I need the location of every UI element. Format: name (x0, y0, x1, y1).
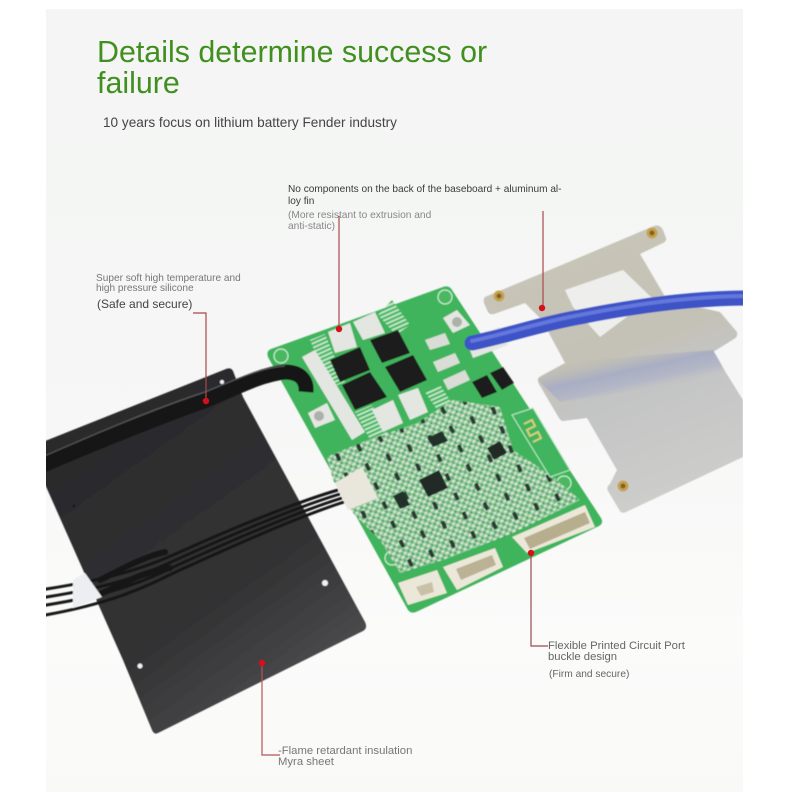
brass stud top right (646, 228, 658, 238)
thermistor probe bulbs (100, 552, 170, 594)
comb solder strips (310, 300, 455, 445)
callout text: flexible printed circuit: Flexible Printed Circuit Port (548, 640, 686, 652)
blue reflection band (538, 350, 728, 402)
callout text: silicone: high pressure silicone (96, 283, 194, 294)
photo: BMS product parts (36, 226, 750, 734)
leader line to sheet (259, 660, 280, 755)
small IC (393, 431, 448, 509)
brass stud bottom (618, 480, 628, 492)
callout: FPC port (528, 550, 686, 680)
aluminium alloy fin plate (484, 226, 743, 513)
antenna area (512, 408, 570, 477)
mounting holes (274, 290, 571, 565)
sheet mounting holes (73, 380, 328, 668)
callout: aluminum fin back of baseboard (288, 184, 562, 332)
plate cut-out window (565, 270, 652, 337)
callout text: flame retardant: -Flame retardant insulation (278, 745, 412, 757)
small connector (398, 570, 447, 605)
leader line to fin (539, 211, 545, 311)
callout note: more resistant: anti-static) (288, 221, 335, 232)
callout note: safe and secure: (Safe and secure) (97, 297, 192, 311)
white JST connector (335, 467, 378, 510)
SMD parts upper right (425, 333, 470, 390)
black silicone power cable (36, 366, 306, 468)
leader line to board (336, 216, 342, 332)
black insulation sheet (40, 368, 366, 734)
leader line to connector (528, 550, 548, 646)
white solder pads (302, 310, 508, 440)
board base (267, 286, 602, 613)
callout text: flexible printed circuit: buckle design (548, 651, 617, 663)
long FPC connector (512, 505, 595, 553)
main controller chip (419, 470, 448, 497)
callout: silicone cable (96, 273, 241, 404)
callout note: more resistant: (More resistant to extrusion and (288, 210, 432, 221)
middle connector (443, 548, 503, 590)
blue silicone cable (472, 296, 750, 343)
callout: insulation sheet (259, 660, 412, 768)
lower component field (327, 400, 580, 573)
callout text: no components: loy fin (288, 196, 314, 207)
power MOSFETs (330, 330, 514, 410)
antenna trace (524, 420, 541, 442)
callout text: silicone: Super soft high temperature and (96, 273, 241, 284)
thin thermistor wires (40, 490, 344, 616)
leader line to cable (193, 313, 209, 404)
callout text: no components: No components on the back of the baseboard + aluminum al- (288, 184, 562, 195)
title: failure (97, 66, 180, 100)
circuit board (267, 286, 602, 613)
callout note: firm and secure: (Firm and secure) (549, 669, 629, 680)
white tape on wires (73, 573, 102, 608)
brass stud top left (494, 290, 504, 302)
subtitle: 10 years focus on lithium battery Fender industry (103, 115, 397, 130)
title: Details determine success or (97, 35, 487, 69)
secondary chip (487, 441, 507, 460)
callout text: flame retardant: Myra sheet (278, 756, 335, 768)
